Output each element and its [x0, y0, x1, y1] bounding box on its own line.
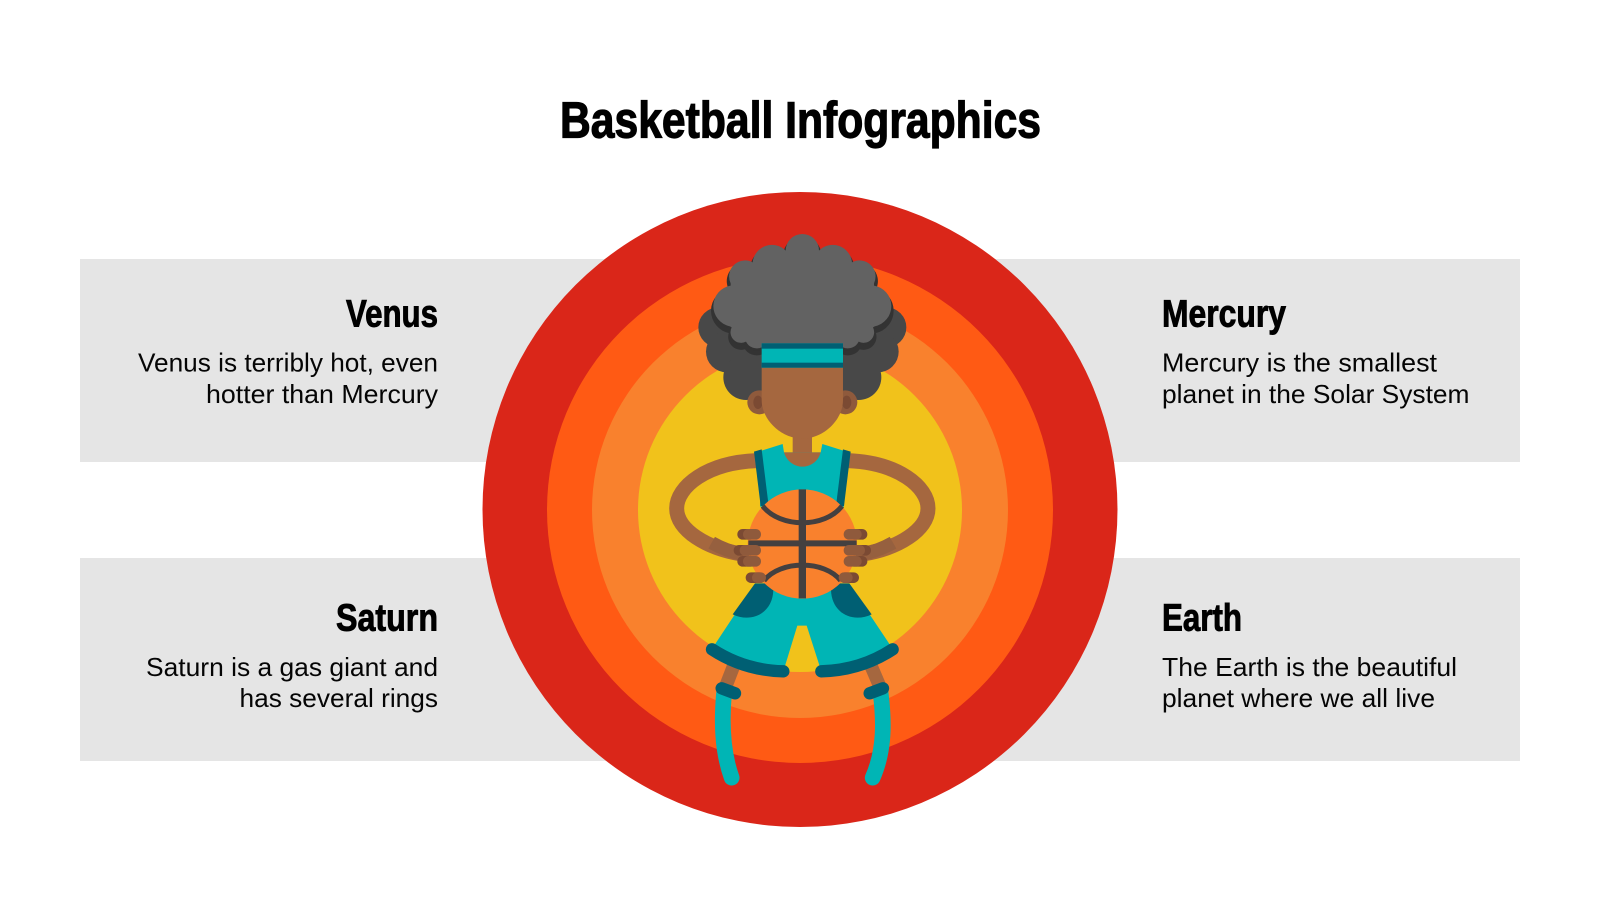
panel: Saturn — [80, 558, 800, 761]
jersey — [754, 444, 851, 507]
player shorts and legs — [712, 489, 893, 778]
pockets — [733, 583, 872, 618]
text: Earth description: The Earth is the beautiful — [1162, 652, 1457, 682]
lower arm shading — [712, 543, 893, 554]
panel: Venus — [80, 259, 800, 462]
text: Saturn description — [146, 652, 438, 713]
shorts — [712, 584, 893, 671]
title: Basketball Infographics — [560, 92, 1041, 148]
player head and torso — [677, 343, 928, 554]
icon: basketball player — [677, 234, 928, 778]
text: Mercury description: planet in the Solar System — [1162, 379, 1470, 409]
text: Saturn description: has several rings — [240, 683, 438, 713]
arms — [677, 461, 928, 554]
text: Mercury description — [1162, 348, 1470, 409]
headband — [762, 343, 843, 368]
concentric circles — [482, 192, 1118, 827]
text: Earth description — [1162, 652, 1457, 713]
face — [762, 367, 843, 439]
text: Earth description: planet where we all live — [1162, 683, 1435, 713]
text: Saturn description: Saturn is a gas giant and — [146, 652, 438, 682]
text: Mercury description: Mercury is the smallest — [1162, 348, 1438, 378]
hands — [739, 534, 866, 578]
neck — [793, 430, 812, 457]
heading: Mercury: Mercury — [1162, 294, 1286, 336]
panel: Mercury — [800, 259, 1520, 462]
text: Venus description: Venus is terribly hot, even — [138, 348, 438, 378]
legs — [725, 665, 881, 688]
shorts hems — [712, 649, 893, 671]
basketball — [748, 489, 857, 599]
text: Venus description: hotter than Mercury — [206, 379, 438, 409]
text: Venus description — [138, 348, 438, 409]
knee bands — [722, 688, 883, 693]
heading: Venus: Venus — [346, 294, 438, 336]
heading: Saturn: Saturn — [336, 598, 438, 640]
ears — [747, 390, 771, 414]
panel: Earth — [800, 558, 1520, 761]
player hair — [698, 234, 906, 400]
socks — [723, 693, 883, 778]
heading: Earth: Earth — [1162, 598, 1242, 640]
